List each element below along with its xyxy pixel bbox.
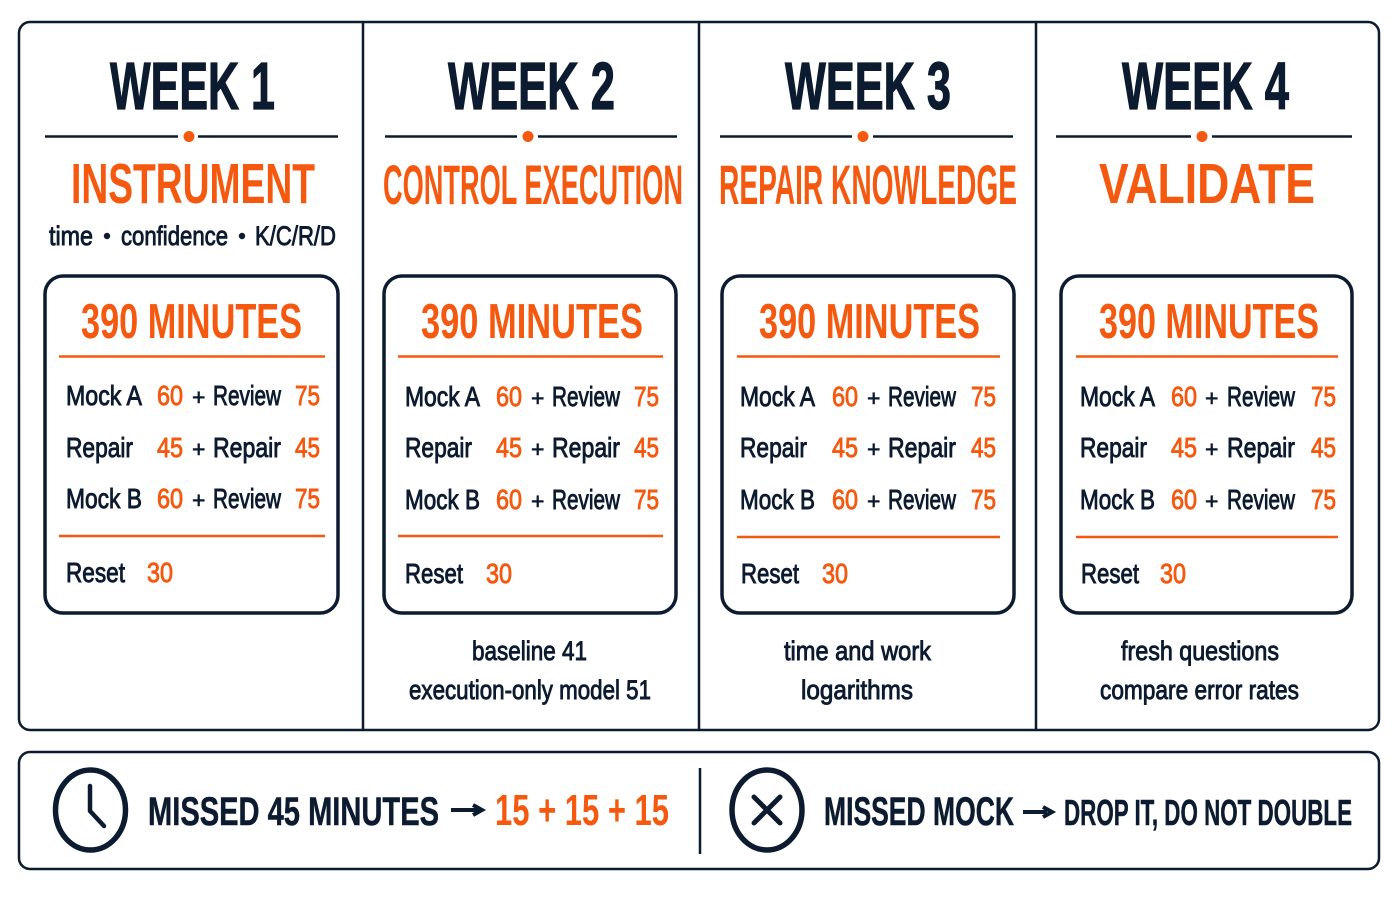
subtitle: repair knowledge: REPAIR KNOWLEDGE [719, 153, 1017, 216]
schedule rows: Review [213, 380, 282, 411]
text: tracking note [49, 221, 336, 251]
schedule rows: + [1205, 436, 1218, 462]
text: tracking note: time [49, 221, 93, 251]
schedule rows: 60 [832, 484, 858, 515]
schedule rows: 75 [971, 484, 996, 515]
schedule rows: 45 [496, 432, 522, 463]
schedule rows: Reset [66, 557, 125, 588]
schedule rows: 75 [295, 380, 320, 411]
schedule rows [1080, 381, 1336, 589]
text: missed mock rule: MISSED MOCK [824, 790, 1014, 834]
schedule rows: + [192, 487, 205, 513]
schedule rows: 45 [157, 432, 183, 463]
schedule rows: Reset [405, 558, 463, 589]
schedule rows: Repair [888, 432, 956, 463]
text: week 2 note: execution-only model 51 [409, 675, 651, 705]
schedule rows: Repair [1080, 432, 1147, 463]
schedule rows: 75 [1311, 381, 1336, 412]
text: missed 45 minutes rule: MISSED 45 MINUTES [148, 790, 439, 834]
schedule rows: 60 [1171, 484, 1197, 515]
heading: week 2: WEEK 2 [448, 49, 615, 124]
schedule rows: 60 [157, 380, 183, 411]
text: week 3 note [784, 636, 931, 705]
card: week 3 schedule [722, 276, 1014, 613]
schedule rows: Mock A [66, 380, 142, 411]
schedule rows: + [531, 385, 544, 411]
divider with dot [45, 131, 338, 142]
schedule rows [740, 381, 996, 589]
schedule rows: Mock A [740, 381, 815, 412]
schedule rows: 60 [496, 381, 522, 412]
schedule rows: Repair [405, 432, 472, 463]
schedule rows: + [1205, 385, 1218, 411]
schedule rows: 75 [634, 484, 659, 515]
schedule rows: Mock A [1080, 381, 1155, 412]
card total: 390 MINUTES [421, 295, 643, 349]
schedule rows: Review [888, 381, 957, 412]
heading: week 1: WEEK 1 [110, 49, 275, 124]
text: week 3 note: logarithms [801, 675, 913, 705]
schedule rows: + [192, 436, 205, 462]
schedule rows: 60 [157, 483, 183, 514]
schedule rows: 30 [822, 558, 848, 589]
panel: bottom rules bar [19, 752, 1379, 869]
schedule rows: Mock B [405, 484, 480, 515]
heading: week 4: WEEK 4 [1122, 49, 1289, 124]
schedule rows: 30 [1160, 558, 1186, 589]
panel: week 4 [1056, 49, 1352, 705]
icon: x in circle [732, 770, 802, 850]
schedule rows: + [867, 436, 880, 462]
schedule rows: Review [552, 484, 621, 515]
schedule rows: 45 [1311, 432, 1336, 463]
text: tracking note: confidence [121, 221, 228, 251]
infographic: CONTROL EXECUTION [383, 153, 683, 216]
schedule rows: + [531, 436, 544, 462]
divider with dot [1056, 131, 1352, 142]
arrow: to drop [1023, 807, 1052, 817]
heading: week 3: WEEK 3 [785, 49, 951, 124]
card total: 390 MINUTES [81, 295, 302, 349]
schedule rows: Repair [66, 432, 133, 463]
text: split into fifteens: 15 + 15 + 15 [495, 786, 669, 835]
schedule rows: 75 [634, 381, 659, 412]
schedule rows: 45 [634, 432, 659, 463]
schedule rows: Review [552, 381, 621, 412]
card total: 390 MINUTES [759, 295, 980, 349]
schedule rows: Review [1227, 484, 1296, 515]
schedule rows: Mock A [405, 381, 480, 412]
schedule rows: Mock B [740, 484, 815, 515]
schedule rows: Mock B [66, 483, 142, 514]
schedule rows: + [192, 384, 205, 410]
schedule rows: + [531, 488, 544, 514]
text: week 4 note: compare error rates [1100, 675, 1299, 705]
panel: week 3 [719, 49, 1017, 705]
schedule rows: 30 [147, 557, 173, 588]
subtitle: validate: VALIDATE [1099, 152, 1315, 216]
schedule rows: Mock B [1080, 484, 1155, 515]
schedule rows: + [1205, 488, 1218, 514]
text: week 2 note [409, 636, 651, 705]
card: week 4 schedule [1061, 276, 1352, 613]
schedule rows: 45 [1171, 432, 1197, 463]
schedule rows: 60 [832, 381, 858, 412]
schedule rows: 60 [496, 484, 522, 515]
schedule rows: Review [213, 483, 282, 514]
schedule rows: 45 [295, 432, 320, 463]
subtitle: instrument: INSTRUMENT [71, 152, 315, 216]
schedule rows: Repair [1227, 432, 1295, 463]
text: week 2 note: baseline 41 [472, 636, 587, 666]
schedule rows: Review [1227, 381, 1296, 412]
text: week 4 note [1100, 636, 1299, 705]
schedule rows: 60 [1171, 381, 1197, 412]
schedule rows: Repair [552, 432, 620, 463]
icon: clock [56, 770, 126, 850]
schedule rows: 45 [971, 432, 996, 463]
schedule rows: Review [888, 484, 957, 515]
schedule rows: 30 [486, 558, 512, 589]
schedule rows: Reset [1081, 558, 1139, 589]
panel: week 2 [383, 49, 683, 705]
card: week 1 schedule [45, 276, 338, 613]
text: week 3 note: time and work [784, 636, 931, 666]
divider with dot [720, 131, 1013, 142]
schedule rows: 75 [295, 483, 320, 514]
text: week 4 note: fresh questions [1121, 636, 1279, 666]
schedule rows: 75 [1311, 484, 1336, 515]
main panel frame [19, 22, 1379, 730]
schedule rows: 45 [832, 432, 858, 463]
schedule rows: + [867, 385, 880, 411]
panel: week 1 [45, 49, 338, 613]
schedule rows [405, 381, 659, 589]
schedule rows: 75 [971, 381, 996, 412]
arrow: to spread [451, 805, 482, 815]
schedule rows [66, 380, 320, 588]
schedule rows: + [867, 488, 880, 514]
schedule rows: Reset [741, 558, 799, 589]
card: week 2 schedule [384, 276, 676, 613]
divider with dot [385, 131, 677, 142]
text: tracking note: K/C/R/D [255, 221, 336, 251]
schedule rows: Repair [740, 432, 807, 463]
schedule rows: Repair [213, 432, 281, 463]
